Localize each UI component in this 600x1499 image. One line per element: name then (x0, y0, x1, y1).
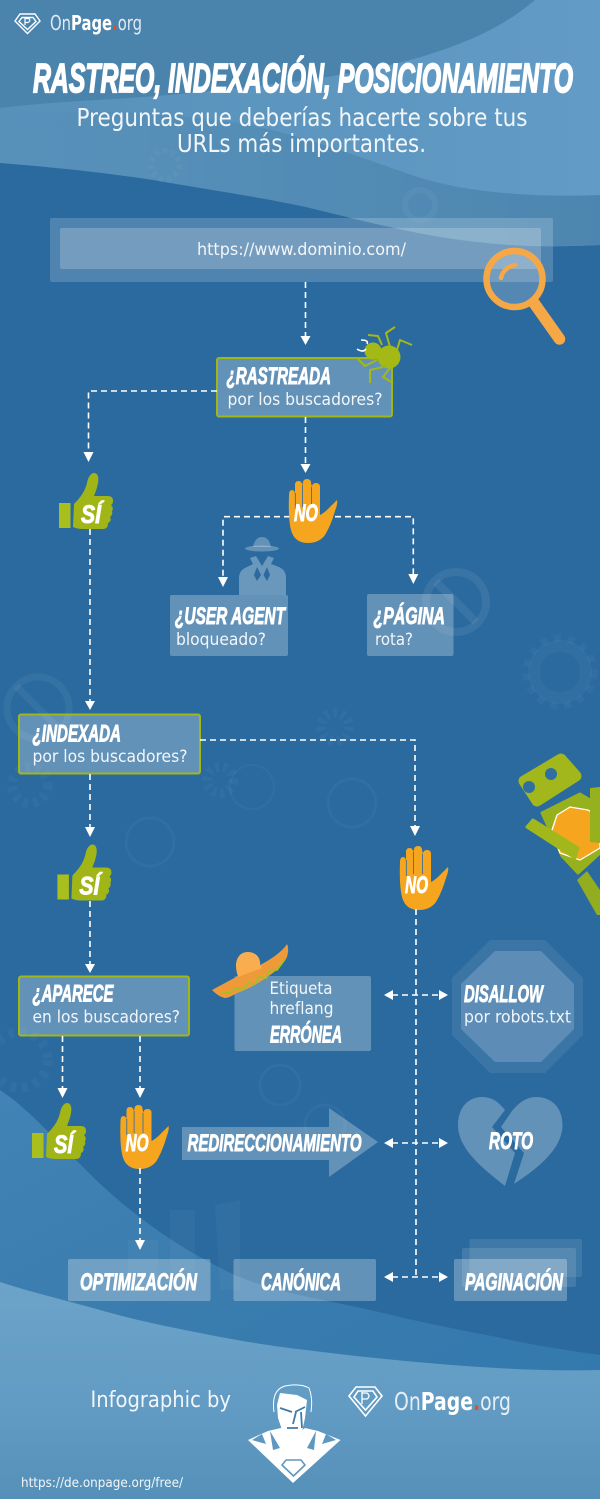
arrow: aparece to no (135, 1036, 145, 1098)
arrow: rastreada to si (84, 391, 217, 462)
arrow: si to aparece (85, 901, 95, 973)
icon: stop hand no 3 (120, 1105, 169, 1169)
icon: diamond logo footer (349, 1387, 382, 1416)
double arrow: redireccionamiento roto (384, 1138, 448, 1148)
panel: roto broken heart: ROTO (489, 1128, 533, 1155)
panel: redireccionamiento arrow: REDIRECCIONAMIENTO (188, 1130, 362, 1157)
icon: thumbs up si 1: SÍ (81, 500, 104, 529)
footer wordmark: OnPage.org (394, 1387, 511, 1416)
panel: pagina rota: rota? (375, 630, 413, 650)
arrow: no vertical trunk (415, 909, 417, 1277)
arrow: si to indexada (85, 529, 95, 710)
icon: stop hand no 3: NO (126, 1130, 149, 1157)
panel: pagina rota: ¿PÁGINA (374, 602, 445, 630)
panel: hreflang: Etiqueta (270, 979, 332, 999)
panel: pagina rota (367, 594, 454, 656)
icon: robot (523, 759, 600, 915)
panel: roto broken heart (458, 1097, 562, 1186)
double arrow: canonica paginacion (384, 1272, 448, 1282)
icon: thumbs up si 2 (57, 844, 111, 900)
url text: https://www.dominio.com/ (197, 240, 406, 260)
panel: disallow octagon: DISALLOW (464, 981, 544, 1008)
icon: thumbs up si 3: SÍ (54, 1130, 76, 1159)
arrow: no to optimizacion (135, 1168, 145, 1250)
arrow: indexada to si (85, 774, 95, 837)
icon: diamond logo (15, 14, 40, 34)
icon: thumbs up si 1 (59, 473, 113, 529)
footer credit text: Infographic by (90, 1388, 231, 1413)
panel: hreflang (234, 976, 371, 1051)
panel: hreflang: hreflang (270, 999, 334, 1019)
panel: rastreada (217, 358, 392, 416)
panel: rastreada: ¿RASTREADA (226, 363, 331, 390)
logo wordmark: OnPage.org (50, 11, 142, 35)
arrow: rastreada to no (300, 417, 310, 473)
panel: optimizacion: OPTIMIZACIÓN (80, 1268, 197, 1296)
faint gears (0, 151, 594, 1290)
subtitle (76, 103, 528, 158)
header logo (15, 11, 142, 35)
panel: indexada: por los buscadores? (32, 747, 188, 767)
subtitle: URLs más importantes. (177, 129, 426, 158)
arrow: indexada to no (200, 740, 420, 836)
panel: user agent: bloqueado? (176, 630, 266, 650)
icon: stop hand no 2: NO (405, 872, 428, 899)
panel: aparece (19, 976, 189, 1036)
panel: URL search bar (50, 218, 553, 282)
icon: thumbs up si 2: SÍ (79, 872, 103, 900)
icon: sombrero (212, 944, 288, 998)
panel: canonica: CANÓNICA (261, 1268, 341, 1296)
arrow: url to rastreada (300, 282, 310, 345)
icon: spider (357, 327, 412, 383)
panel: rastreada: por los buscadores? (228, 390, 382, 410)
footer url: https://de.onpage.org/free/ (21, 1476, 184, 1491)
panel: hreflang: ERRÓNEA (270, 1020, 342, 1048)
panel: indexada: ¿INDEXADA (32, 720, 121, 748)
panel: disallow octagon: por robots.txt (464, 1008, 571, 1028)
panel: redireccionamiento arrow (182, 1108, 378, 1177)
icon: stop hand no 2 (400, 846, 448, 910)
panel: canonica (234, 1259, 376, 1301)
icon: spy (239, 537, 286, 595)
arrow: aparece to si (58, 1036, 68, 1098)
icon: stop hand no 1 (289, 479, 337, 543)
panel: optimizacion (68, 1259, 210, 1301)
subtitle: Preguntas que deberías hacerte sobre tus (76, 103, 528, 132)
panel: aparece: ¿APARECE (32, 980, 114, 1008)
icon: magnifying glass (486, 251, 560, 339)
panel: user agent (170, 595, 288, 656)
panel: aparece: en los buscadores? (32, 1008, 180, 1028)
panel: user agent: ¿USER AGENT (175, 603, 286, 630)
panel: paginacion stacked pages (454, 1239, 582, 1301)
panel: disallow octagon (452, 940, 583, 1073)
panel: indexada (19, 714, 200, 774)
icon: superhero mascot (248, 1385, 340, 1483)
icon: stop hand no 1: NO (294, 500, 318, 527)
footer logo (349, 1387, 511, 1416)
arrow: no split to user agent and pagina (218, 517, 418, 587)
double arrow: hreflang disallow (384, 990, 448, 1000)
icon: thumbs up si 3 (32, 1103, 86, 1159)
